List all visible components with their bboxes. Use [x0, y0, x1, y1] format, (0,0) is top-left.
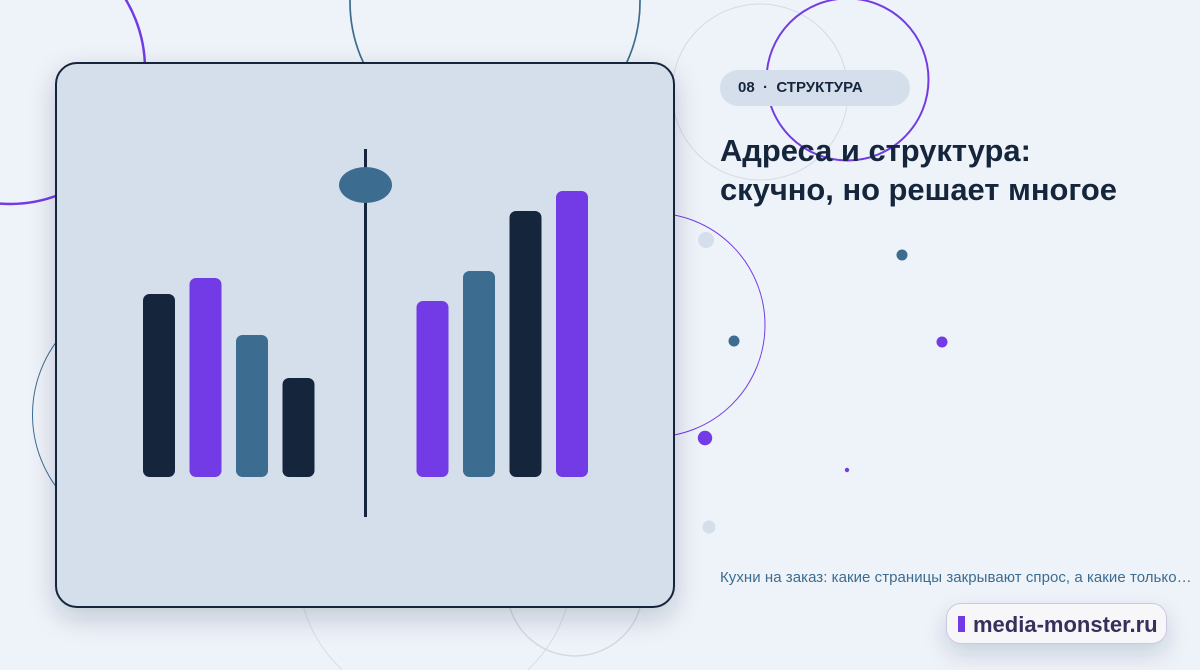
section tag pill: 08 · СТРУКТУРА [738, 79, 863, 96]
dot: teal upper [896, 250, 908, 260]
bar: left 3 [236, 335, 268, 477]
circle: grey bottom large [302, 600, 568, 670]
panel: chart card [55, 62, 675, 608]
bar: right 2 [463, 271, 495, 477]
circle: grey top right [672, 4, 848, 180]
bar: right 3 [510, 211, 542, 477]
right bar group [416, 191, 588, 477]
divider line [364, 149, 367, 517]
brand badge [946, 603, 1167, 644]
bar: left 1 [143, 294, 175, 477]
dot: grey upper [698, 232, 714, 248]
caption text: Кухни на заказ: какие страницы закрывают спрос, а какие только… [720, 569, 1192, 586]
bar: left 4 [282, 378, 314, 477]
dot: teal left [728, 336, 740, 346]
dot: purple large [698, 431, 712, 445]
bar: left 2 [190, 278, 222, 477]
brand badge drop shadow [946, 613, 1167, 654]
circle: grey bottom small [507, 520, 643, 656]
circle: purple top left [0, 0, 145, 204]
circle: teal left [32, 292, 278, 537]
brand accent bar [958, 616, 965, 632]
left bar group [143, 278, 314, 477]
bar: right 1 [416, 301, 448, 477]
dot: grey lower [702, 520, 716, 534]
circle: purple middle [541, 213, 765, 437]
dot: purple small [845, 468, 849, 472]
title [720, 133, 1117, 207]
circle: teal top [350, 0, 640, 147]
card drop shadow [55, 72, 675, 618]
divider marker ellipse [339, 167, 392, 203]
title: Адреса и структура: [720, 133, 1031, 168]
dot: purple right [936, 336, 948, 348]
brand name: media-monster.ru [973, 612, 1158, 637]
title: скучно, но решает многое [720, 172, 1117, 207]
bar: right 4 [556, 191, 588, 477]
circle: purple top right [766, 0, 928, 160]
section tag pill [720, 70, 910, 106]
